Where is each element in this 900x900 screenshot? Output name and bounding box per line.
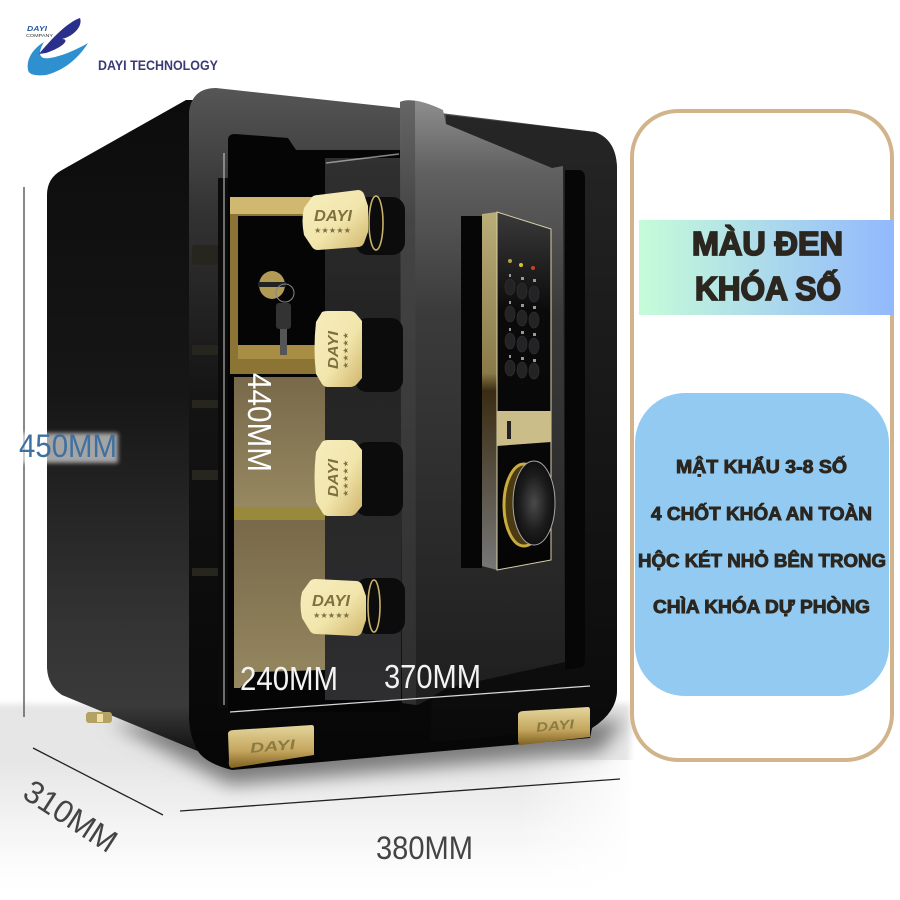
gold feet <box>228 707 590 768</box>
status LEDs <box>508 259 535 270</box>
title line 2: KHÓA SỐ <box>695 269 841 307</box>
dial <box>504 461 555 546</box>
key <box>258 271 294 355</box>
feature 1: MẬT KHẨU 3-8 SỐ <box>676 456 847 477</box>
dimension: interior depth: 240MM <box>240 660 338 697</box>
hinge blocks <box>192 245 220 576</box>
bolt 3: DAYI <box>325 458 342 497</box>
bolt 3 <box>314 440 403 516</box>
top shelf gold <box>230 197 320 214</box>
interior thin lines <box>224 153 590 712</box>
dimension: interior width: 370MM <box>384 658 481 695</box>
front right frame <box>430 115 617 742</box>
left foot <box>228 725 314 768</box>
dimension: height line <box>23 187 25 717</box>
dimension: width line <box>180 779 620 811</box>
panel outline <box>632 111 892 760</box>
keypad <box>505 279 539 379</box>
bolt 4: DAYI <box>312 593 351 610</box>
dimension: depth label: 310MM <box>17 773 124 860</box>
feature 2: 4 CHỐT KHÓA AN TOÀN <box>651 503 872 524</box>
bolt 2: DAYI <box>325 330 342 369</box>
left foot: DAYI <box>249 736 297 756</box>
door inner face <box>325 158 401 700</box>
logo wordmark: DAYI <box>27 26 48 33</box>
rear foot <box>86 712 112 723</box>
key labels <box>509 274 536 362</box>
door edge and front face <box>400 100 565 705</box>
bolt 4 <box>300 578 405 636</box>
company name: DAYI TECHNOLOGY <box>98 58 218 73</box>
key compartment <box>230 214 320 374</box>
title line 1: MÀU ĐEN <box>692 225 843 262</box>
right foot <box>518 707 590 745</box>
floor background <box>0 704 640 900</box>
title band <box>639 220 894 315</box>
right foot: DAYI <box>535 716 575 735</box>
bolt 2: ★★★★★ <box>342 332 350 369</box>
locking bolts <box>300 190 405 636</box>
lower gold panels <box>234 377 326 507</box>
safe body <box>47 88 617 770</box>
bolt 3: ★★★★★ <box>342 460 350 497</box>
features box <box>635 393 889 696</box>
lock face <box>497 212 551 570</box>
bolt 1: ★★★★★ <box>314 226 351 235</box>
lock gold side <box>482 212 497 570</box>
logo subtitle: COMPANY <box>26 33 53 38</box>
safe interior <box>228 134 400 712</box>
safe side panel <box>47 100 200 752</box>
feature 4: CHÌA KHÓA DỰ PHÒNG <box>653 596 870 617</box>
safe front panel <box>189 88 617 770</box>
logo <box>26 18 88 75</box>
feature 3: HỘC KÉT NHỎ BÊN TRONG <box>638 550 886 571</box>
door edge strip <box>400 100 416 705</box>
bolt 2 <box>314 311 403 392</box>
hinge strip <box>218 178 229 708</box>
bolt 1 <box>302 190 405 255</box>
electronic lock panel <box>461 212 555 570</box>
dimension: depth line <box>33 748 163 815</box>
logo swoosh <box>28 18 88 75</box>
dimension: width label: 380MM <box>376 830 473 866</box>
panel: product info <box>632 111 894 760</box>
key slot plate <box>497 411 551 446</box>
door side channel <box>565 170 585 670</box>
dimension: height label: 450MM <box>19 428 117 464</box>
bolt 1: DAYI <box>314 208 353 225</box>
lock back <box>461 216 482 568</box>
bolt 4: ★★★★★ <box>313 611 350 620</box>
dimension: interior height: 440MM <box>241 373 278 472</box>
